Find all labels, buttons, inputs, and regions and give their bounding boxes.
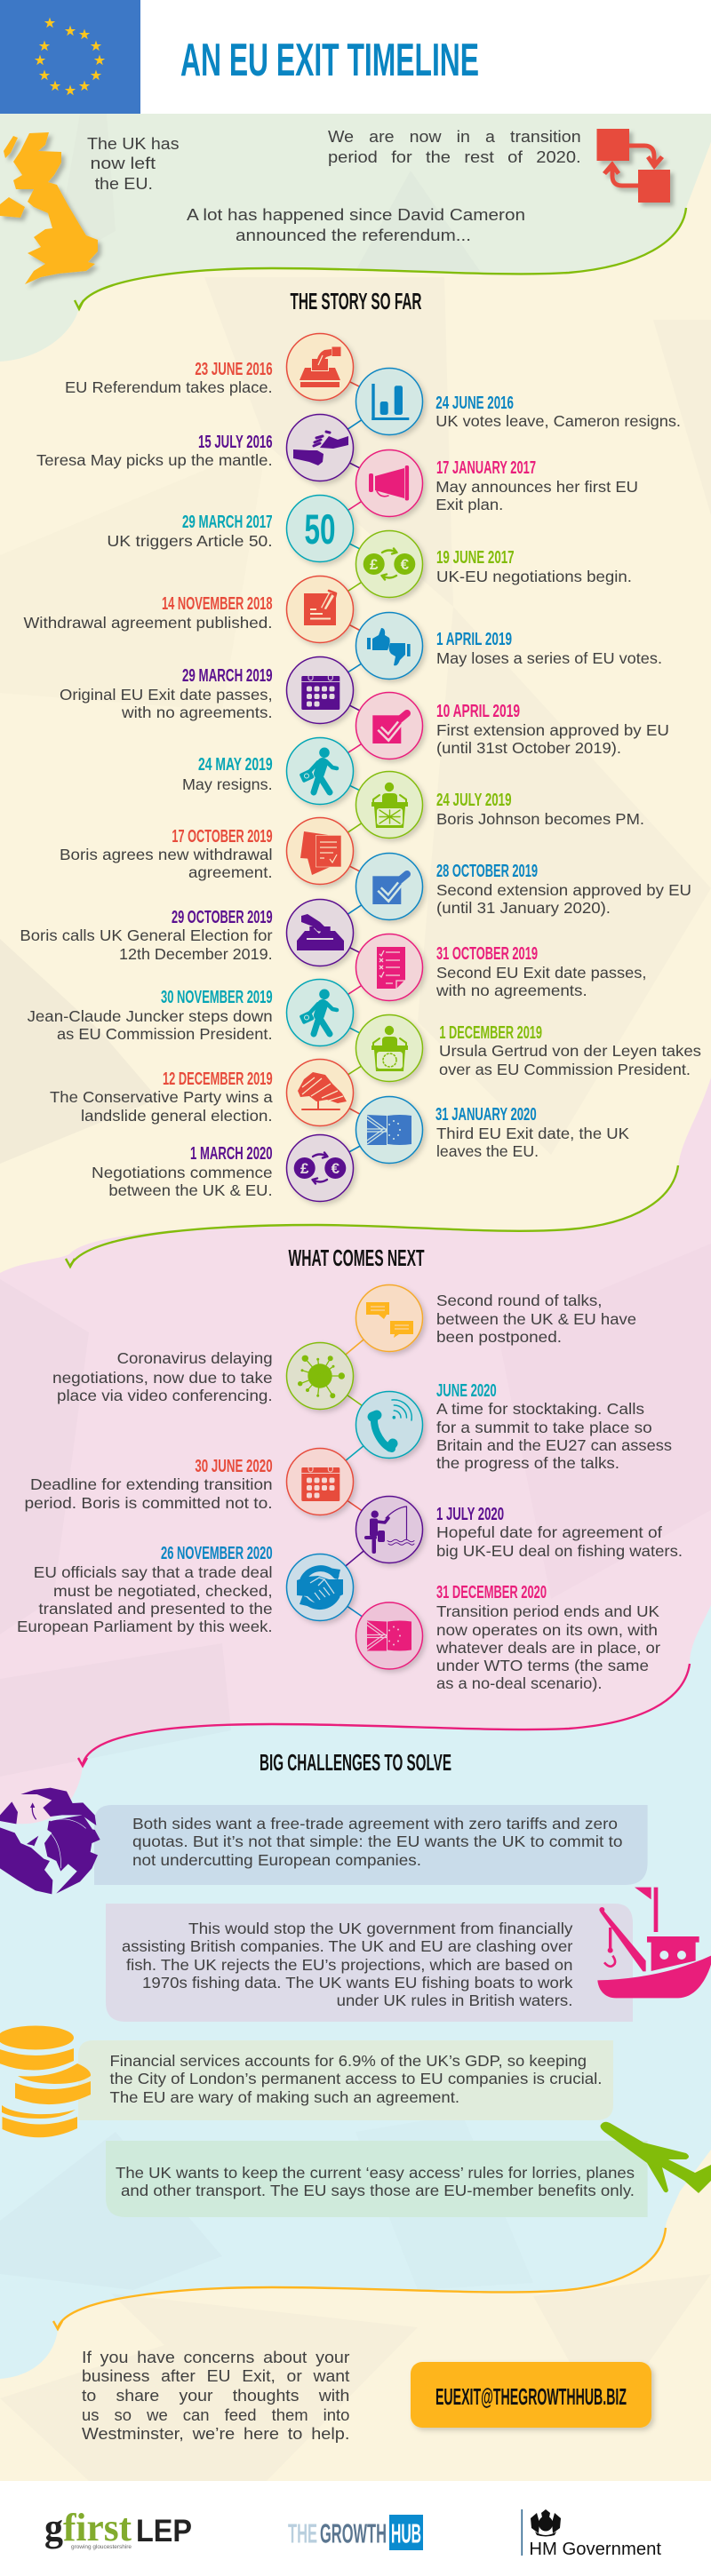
text: transition period [328, 127, 581, 166]
date: 31 JANUARY 2020 [435, 1104, 537, 1125]
timeline connectors [320, 367, 389, 1635]
description: May resigns. [182, 775, 273, 793]
event: 31 October 2019 [356, 934, 647, 1000]
next: second round of talks [356, 1284, 636, 1352]
description: First extension approved by EU [436, 721, 669, 739]
event: 29 March 2017 [107, 496, 354, 561]
description: Boris calls UK General Election for [20, 926, 273, 944]
event: 23 June 2016 [65, 334, 354, 400]
header band [0, 0, 711, 114]
next: 30 June 2020 [25, 1448, 354, 1515]
icon: podium with UK flag [356, 771, 423, 839]
icon: phone [356, 1391, 423, 1459]
description: with no agreements. [121, 704, 273, 721]
icon: bar chart [356, 368, 423, 435]
date: 17 JANUARY 2017 [436, 457, 536, 478]
text: UK has left: The UK has [87, 134, 180, 153]
icon: walking figure [286, 979, 354, 1046]
description: as a no-deal scenario). [436, 1674, 603, 1692]
icon: fisherman [356, 1496, 423, 1563]
icon: chat bubbles [356, 1284, 423, 1352]
event: 14 November 2018 [23, 576, 354, 643]
icon: UK and EU flag [356, 1096, 423, 1164]
description [25, 1475, 273, 1512]
date: 1 DECEMBER 2019 [439, 1022, 542, 1043]
icon: globe [0, 1788, 100, 1894]
description [435, 478, 638, 513]
event: 30 November 2019 [28, 979, 353, 1046]
description: must be negotiated, checked, [53, 1582, 273, 1600]
description: now operates on its own, with [436, 1621, 658, 1639]
description [436, 1125, 629, 1160]
icon: podium with EU stars [356, 1014, 423, 1082]
logo: the growth hub [288, 2515, 423, 2550]
icon: plane [601, 2122, 711, 2193]
logo: gfirst LEP [44, 2506, 192, 2550]
next: 26 November 2020 [17, 1543, 354, 1635]
date: 23 JUNE 2016 [195, 359, 273, 379]
logo: the growth hub: THE [288, 2517, 317, 2549]
description [20, 926, 273, 963]
next: coronavirus [52, 1343, 354, 1409]
description: the progress of the talks. [436, 1454, 619, 1472]
panel text: The UK wants to keep the current ‘easy access’ rules for lorries, planes [116, 2164, 635, 2182]
text: transition period: period for the rest of 2020. [328, 147, 581, 166]
icon: coins [0, 2025, 91, 2137]
panel text: under UK rules in British waters. [337, 1992, 572, 2009]
event: 24 June 2016 [356, 368, 681, 435]
panel text: 1970s fishing data. The UK wants EU fishing boats to work [142, 1974, 573, 1992]
event: 19 June 2017 [356, 531, 632, 597]
event: 12 December 2019 [50, 1059, 354, 1126]
next: 1 July 2020 [356, 1496, 683, 1563]
event: 28 October 2019 [356, 853, 691, 920]
icon: UK and EU flag [356, 1602, 423, 1669]
description: UK triggers Article 50. [107, 532, 273, 550]
text: UK has left: now left [91, 154, 156, 172]
description: between the UK & EU have [436, 1310, 636, 1328]
date: 14 NOVEMBER 2018 [162, 593, 273, 614]
panel text: The EU are wary of making such an agreement. [110, 2088, 459, 2106]
icon: virus [286, 1343, 354, 1409]
panel: transport [106, 2141, 648, 2217]
date: JUNE 2020 [436, 1380, 497, 1401]
panel text: and other transport. The EU says those are EU-member benefits only. [121, 2182, 635, 2199]
panel text: assisting British companies. The UK and EU are clashing over [122, 1937, 573, 1955]
description: Deadline for extending transition [30, 1475, 273, 1493]
description [92, 1164, 273, 1199]
description: for a summit to take place so [436, 1419, 652, 1436]
logo: gfirst LEP: growing gloucestershire [71, 2544, 132, 2550]
email button [411, 2362, 651, 2428]
description: Third EU Exit date, the UK [436, 1125, 629, 1142]
description: Second round of talks, [436, 1292, 603, 1309]
description: Coronavirus delaying [117, 1349, 273, 1367]
description: Boris Johnson becomes PM. [436, 810, 644, 828]
event: 24 July 2019 [356, 771, 644, 839]
description: 12th December 2019. [119, 945, 273, 963]
description: been postponed. [436, 1328, 562, 1346]
description: translated and presented to the [38, 1600, 273, 1618]
arrow: green curve [75, 208, 686, 309]
description: under WTO terms (the same [436, 1657, 649, 1674]
date: 29 OCTOBER 2019 [172, 907, 273, 927]
next: June 2020 [356, 1380, 672, 1472]
description: with no agreements. [435, 982, 587, 999]
description [17, 1563, 273, 1635]
description: EU Referendum takes place. [65, 378, 273, 396]
panel text [122, 1920, 573, 2009]
panel text: quotas. But it’s not that simple: the EU wants the UK to commit to [132, 1833, 622, 1850]
heading: big challenges: BIG CHALLENGES TO SOLVE [260, 1751, 451, 1776]
icon: handover [286, 414, 354, 481]
description: agreement. [188, 863, 273, 881]
date: 26 NOVEMBER 2020 [161, 1543, 273, 1563]
date: 1 APRIL 2019 [436, 629, 512, 649]
icon: agreement papers [286, 817, 354, 885]
text: since the referendum: announced the referendum... [236, 226, 471, 244]
next: 31 December 2020 [356, 1582, 660, 1692]
date: 15 JULY 2016 [198, 432, 273, 452]
arrow: green curve 2 [66, 1165, 678, 1267]
description: Transition period ends and UK [436, 1602, 659, 1620]
text: transition period: We are now in a transition [328, 127, 581, 146]
description [60, 846, 273, 881]
icon: calendar [286, 657, 354, 723]
description: (until 31 January 2020). [436, 899, 611, 917]
event: 29 March 2019 [60, 657, 354, 723]
date: 29 MARCH 2017 [182, 512, 273, 532]
heading: what comes next: WHAT COMES NEXT [288, 1246, 425, 1271]
icon: fishing boat [597, 1888, 711, 1998]
panel text: not undercutting European companies. [132, 1851, 421, 1869]
description [436, 881, 691, 917]
footer [0, 2481, 711, 2576]
description: Original EU Exit date passes, [60, 686, 273, 704]
logo: the growth hub: GROWTH [320, 2517, 387, 2549]
logo: gfirst LEP: LEP [136, 2514, 192, 2548]
heading: the story so far: THE STORY SO FAR [290, 290, 421, 314]
panel text: Financial services accounts for 6.9% of the UK’s GDP, so keeping [110, 2052, 587, 2070]
date: 10 APRIL 2019 [436, 701, 520, 721]
arrow: pink curve [78, 1664, 690, 1766]
text: UK has left: the EU. [95, 174, 153, 193]
icon: checklist [356, 934, 423, 1000]
description: big UK-EU deal on fishing waters. [436, 1542, 683, 1560]
description [436, 1400, 672, 1472]
arrow: orange curve [53, 2228, 666, 2329]
icon: walking figure [286, 737, 354, 805]
description: over as EU Commission President. [439, 1061, 691, 1078]
event: 24 May 2019 [182, 737, 354, 805]
logo: HM Government [521, 2509, 661, 2559]
icon: check box [356, 693, 423, 759]
description [435, 964, 647, 999]
date: 1 MARCH 2020 [190, 1143, 273, 1164]
description: Britain and the EU27 can assess [436, 1436, 672, 1454]
panel: fishing [106, 1904, 633, 2022]
icon: conservative tree [286, 1059, 354, 1126]
date: 19 JUNE 2017 [436, 547, 515, 568]
icon: megaphone [356, 449, 423, 517]
description [435, 1602, 660, 1692]
event: 29 October 2019 [20, 899, 354, 966]
icon: article 50 [286, 496, 354, 561]
contact text [82, 2348, 349, 2443]
date: 17 OCTOBER 2019 [172, 826, 273, 847]
description: EU officials say that a trade deal [34, 1563, 273, 1581]
panel text: This would stop the UK government from financially [188, 1920, 573, 1937]
description: European Parliament by this week. [17, 1618, 273, 1635]
description: UK-EU negotiations begin. [436, 568, 632, 585]
panel: free trade [94, 1805, 648, 1885]
description: The Conservative Party wins a [50, 1088, 273, 1106]
description: Ursula Gertrud von der Leyen takes [439, 1042, 701, 1060]
event: 1 December 2019 [356, 1014, 701, 1082]
logo: HM Government: HM Government [529, 2540, 661, 2559]
text: since the referendum: A lot has happened since David Cameron [187, 205, 525, 224]
contact text: us so we can feed them into [82, 2405, 349, 2424]
panel text: fish. The UK rejects the EU’s projections, which are based on [126, 1956, 572, 1974]
contact text: If you have concerns about your [82, 2348, 349, 2366]
date: 24 JULY 2019 [436, 790, 512, 810]
date: 12 DECEMBER 2019 [163, 1069, 273, 1089]
icon: currency exchange [286, 1135, 354, 1201]
description: UK votes leave, Cameron resigns. [435, 412, 681, 430]
description: place via video conferencing. [57, 1387, 273, 1404]
contact text: business after EU Exit, or want [82, 2366, 349, 2385]
description: (until 31st October 2019). [436, 739, 621, 757]
date: 24 MAY 2019 [198, 754, 273, 775]
description: Withdrawal agreement published. [23, 614, 272, 632]
event: 1 April 2019 [356, 613, 662, 679]
icon: UK map [0, 132, 98, 284]
panel: financial services [78, 2040, 613, 2120]
icon: signed document [286, 576, 354, 643]
date: 31 DECEMBER 2020 [436, 1582, 547, 1602]
description: landslide general election. [81, 1107, 273, 1125]
description: Jean-Claude Juncker steps down [28, 1007, 273, 1025]
description [28, 1007, 273, 1043]
date: 29 MARCH 2019 [182, 665, 273, 686]
date: 1 JULY 2020 [436, 1504, 504, 1524]
logo: gfirst LEP: g [44, 2506, 63, 2549]
icon: EU flag [0, 0, 140, 114]
icon: transition arrows [597, 129, 670, 203]
event: 17 October 2019 [60, 817, 354, 885]
panel text [110, 2052, 603, 2106]
description: whatever deals are in place, or [435, 1639, 660, 1657]
icon: ballot box [286, 334, 354, 400]
text: since the referendum [187, 205, 525, 244]
contact text: to share your thoughts with [82, 2386, 349, 2405]
description: A time for stocktaking. Calls [436, 1400, 644, 1418]
date: 30 JUNE 2020 [195, 1456, 273, 1476]
logo: the growth hub: HUB [391, 2517, 421, 2549]
event: 31 January 2020 [356, 1096, 629, 1164]
panel text: Both sides want a free-trade agreement with zero tariffs and zero [132, 1815, 618, 1833]
description [60, 686, 273, 721]
description [439, 1042, 701, 1078]
event: 10 April 2019 [356, 693, 669, 759]
icon: calendar [286, 1448, 354, 1515]
contact text: Westminster, we’re here to help. [82, 2424, 349, 2443]
date: 30 NOVEMBER 2019 [161, 987, 273, 1007]
icon: article 50: 50 [304, 505, 336, 553]
description: period. Boris is committed not to. [25, 1494, 273, 1512]
panel text: the City of London’s permanent access to EU companies is crucial. [110, 2070, 603, 2087]
icon: check box [356, 853, 423, 920]
event: 15 July 2016 [36, 414, 354, 481]
description: May announces her first EU [435, 478, 638, 496]
description [436, 1523, 683, 1560]
icon: handshake [286, 1554, 354, 1620]
description: Negotiations commence [92, 1164, 273, 1181]
description: May loses a series of EU votes. [436, 649, 662, 667]
panel text [116, 2164, 635, 2199]
description: Hopeful date for agreement of [436, 1523, 662, 1541]
description: between the UK & EU. [108, 1181, 273, 1199]
event: 17 January 2017 [356, 449, 638, 517]
description [436, 1292, 636, 1346]
icon: thumbs up and down [356, 613, 423, 679]
panel text [132, 1815, 622, 1869]
description [50, 1088, 273, 1125]
description: Boris agrees new withdrawal [60, 846, 273, 863]
description: Second extension approved by EU [436, 881, 691, 899]
description: Second EU Exit date passes, [436, 964, 647, 982]
date: 31 OCTOBER 2019 [436, 943, 538, 964]
logo: gfirst LEP: first [63, 2506, 132, 2549]
date: 24 JUNE 2016 [435, 393, 514, 413]
description [436, 721, 669, 757]
description: as EU Commission President. [57, 1025, 273, 1043]
date: 28 OCTOBER 2019 [436, 861, 538, 881]
description: negotiations, now due to take [52, 1369, 273, 1387]
description: Exit plan. [435, 496, 503, 513]
text: UK has left [87, 134, 180, 193]
description [52, 1349, 273, 1404]
icon: currency exchange [356, 531, 423, 597]
icon: ballot box [286, 899, 354, 966]
description: Teresa May picks up the mantle. [36, 451, 273, 469]
event: 1 March 2020 [92, 1135, 354, 1201]
title: AN EU EXIT TIMELINE [180, 35, 479, 86]
icon: royal crest [531, 2509, 561, 2537]
description: leaves the EU. [436, 1142, 539, 1160]
